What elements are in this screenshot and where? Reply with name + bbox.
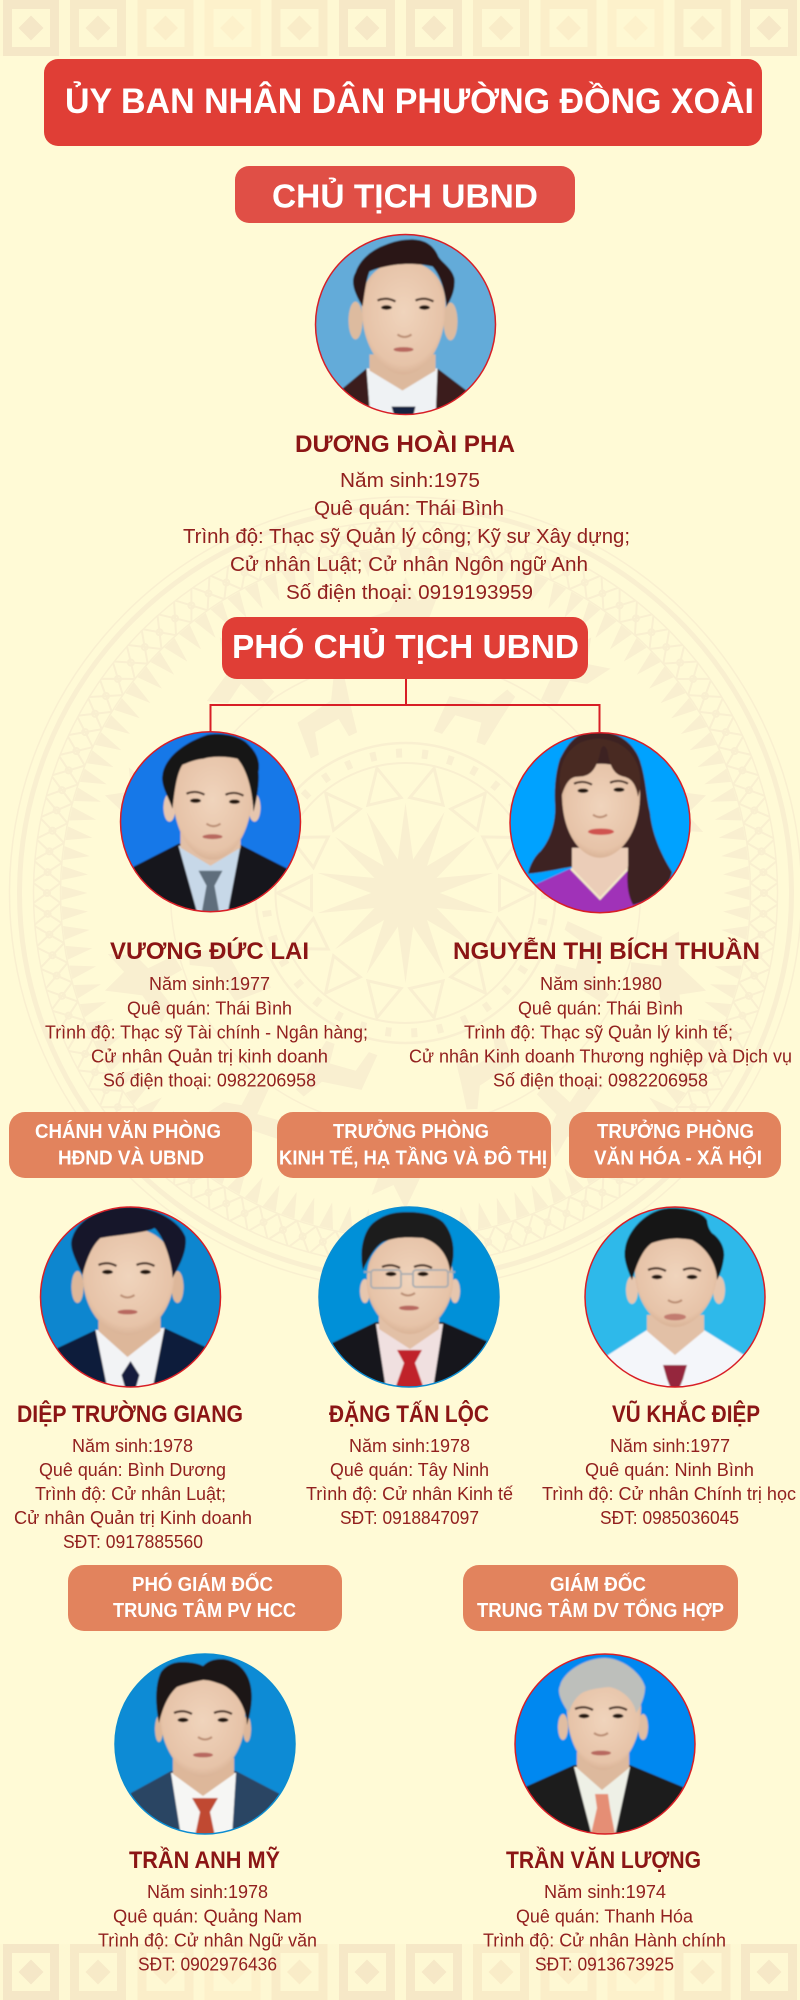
name: Đặng Tấn Lộc: ĐẶNG TẤN LỘC xyxy=(329,1400,489,1428)
panel: Trần Anh Mỹ xyxy=(98,1653,317,1974)
label: trưởng phòng văn hóa: TRƯỞNG PHÒNG xyxy=(597,1119,754,1143)
bio: Trần Anh Mỹ: SĐT: 0902976436 xyxy=(138,1954,277,1974)
panel: Trần Văn Lượng xyxy=(483,1653,726,1974)
name: Diệp Trường Giang: DIỆP TRƯỜNG GIANG xyxy=(17,1400,243,1428)
bio: Trần Anh Mỹ: Năm sinh:1978 xyxy=(147,1882,268,1902)
bio: Vương Đức Lai: Cử nhân Quản trị kinh doanh xyxy=(91,1046,328,1066)
bio: Vương Đức Lai: Năm sinh:1977 xyxy=(149,974,270,994)
bio: Đặng Tấn Lộc: Trình độ: Cử nhân Kinh tế xyxy=(306,1484,513,1504)
label: chánh văn phòng: HĐND VÀ UBND xyxy=(58,1146,204,1170)
bio: Dương Hoài Pha: Quê quán: Thái Bình xyxy=(314,498,504,520)
bio: Dương Hoài Pha: Trình độ: Thạc sỹ Quản lý công; Kỹ sư Xây dựng; xyxy=(183,526,630,548)
name: Dương Hoài Pha: DƯƠNG HOÀI PHA xyxy=(295,430,515,458)
label: trưởng phòng kinh tế xyxy=(277,1112,551,1178)
bio: Vương Đức Lai: Quê quán: Thái Bình xyxy=(127,998,292,1018)
bio: Nguyễn Thị Bích Thuần: Quê quán: Thái Bình xyxy=(518,998,683,1018)
label: trưởng phòng kinh tế: KINH TẾ, HẠ TẦNG VÀ ĐÔ THỊ xyxy=(279,1146,547,1170)
heading: chủ tịch UBND: CHỦ TỊCH UBND xyxy=(272,178,538,214)
bio: Diệp Trường Giang: SĐT: 0917885560 xyxy=(63,1532,203,1552)
label: chánh văn phòng: CHÁNH VĂN PHÒNG xyxy=(35,1119,221,1143)
connector lines xyxy=(210,679,600,733)
panel: chairman Dương Hoài Pha xyxy=(183,234,630,604)
label: phó giám đốc trung tâm PV HCC xyxy=(68,1565,342,1631)
bio: Vương Đức Lai xyxy=(45,974,368,1090)
name: Vương Đức Lai: VƯƠNG ĐỨC LAI xyxy=(110,937,309,965)
bio: Nguyễn Thị Bích Thuần xyxy=(409,974,792,1090)
label: chánh văn phòng xyxy=(9,1112,252,1178)
bio: Trần Anh Mỹ: Quê quán: Quảng Nam xyxy=(113,1906,302,1926)
label: giám đốc trung tâm DV tổng hợp xyxy=(463,1565,738,1631)
name: Nguyễn Thị Bích Thuần: NGUYỄN THỊ BÍCH THUẦN xyxy=(453,936,760,965)
portrait: Vương Đức Lai xyxy=(120,731,302,917)
bio: Đặng Tấn Lộc: Năm sinh:1978 xyxy=(349,1436,470,1456)
panel: Diệp Trường Giang xyxy=(14,1206,252,1552)
bio: Trần Văn Lượng: Trình độ: Cử nhân Hành chính xyxy=(483,1930,726,1950)
bio: Nguyễn Thị Bích Thuần: Năm sinh:1980 xyxy=(540,974,662,994)
label: trưởng phòng văn hóa xyxy=(569,1112,781,1178)
portrait: Nguyễn Thị Bích Thuần xyxy=(509,732,691,918)
bio: Vũ Khắc Điệp: SĐT: 0985036045 xyxy=(600,1508,739,1528)
label: giám đốc trung tâm DV tổng hợp: GIÁM ĐỐC xyxy=(550,1572,646,1596)
bio: Diệp Trường Giang: Trình độ: Cử nhân Luật; xyxy=(35,1484,226,1504)
portrait: Vũ Khắc Điệp xyxy=(584,1206,766,1392)
heading: phó chủ tịch UBND: PHÓ CHỦ TỊCH UBND xyxy=(232,628,579,665)
panel: Đặng Tấn Lộc xyxy=(306,1206,513,1528)
heading: phó chủ tịch UBND xyxy=(222,617,588,679)
name: Trần Anh Mỹ: TRẦN ANH MỸ xyxy=(129,1846,280,1874)
bio: Vũ Khắc Điệp: Trình độ: Cử nhân Chính trị học xyxy=(542,1484,796,1504)
bio: Vũ Khắc Điệp: Quê quán: Ninh Bình xyxy=(585,1460,754,1480)
bio: Vũ Khắc Điệp: Năm sinh:1977 xyxy=(610,1436,730,1456)
panel: Vương Đức Lai xyxy=(45,731,368,1090)
title banner xyxy=(44,59,762,146)
bio: Trần Anh Mỹ: Trình độ: Cử nhân Ngữ văn xyxy=(98,1930,317,1950)
bio: Diệp Trường Giang: Quê quán: Bình Dương xyxy=(39,1460,226,1480)
bio: Đặng Tấn Lộc: Quê quán: Tây Ninh xyxy=(330,1460,489,1480)
heading: chủ tịch UBND xyxy=(235,166,575,223)
title banner: ỦY BAN NHÂN DÂN PHƯỜNG ĐỒNG XOÀI xyxy=(65,81,754,121)
bio: Trần Anh Mỹ xyxy=(98,1882,317,1974)
bio: Dương Hoài Pha: Cử nhân Luật; Cử nhân Ngôn ngữ Anh xyxy=(230,554,588,576)
bio: Vương Đức Lai: Trình độ: Thạc sỹ Tài chính - Ngân hàng; xyxy=(45,1022,368,1042)
panel: Vũ Khắc Điệp xyxy=(542,1206,796,1528)
bio: Đặng Tấn Lộc: SĐT: 0918847097 xyxy=(340,1508,479,1528)
label: trưởng phòng kinh tế: TRƯỞNG PHÒNG xyxy=(333,1119,489,1143)
portrait: Trần Văn Lượng xyxy=(514,1653,696,1840)
name: Trần Văn Lượng: TRẦN VĂN LƯỢNG xyxy=(506,1846,701,1874)
label: giám đốc trung tâm DV tổng hợp: TRUNG TÂM DV TỔNG HỢP xyxy=(477,1598,724,1622)
bio: Nguyễn Thị Bích Thuần: Cử nhân Kinh doanh Thương nghiệp và Dịch vụ xyxy=(409,1046,792,1066)
bio: Dương Hoài Pha xyxy=(183,470,630,604)
bio: Vũ Khắc Điệp xyxy=(542,1436,796,1528)
bio: Vương Đức Lai: Số điện thoại: 0982206958 xyxy=(103,1070,316,1090)
bio: Trần Văn Lượng: SĐT: 0913673925 xyxy=(535,1954,674,1974)
bio: Trần Văn Lượng: Năm sinh:1974 xyxy=(544,1882,666,1902)
label: phó giám đốc trung tâm PV HCC: TRUNG TÂM PV HCC xyxy=(113,1598,296,1622)
bio: Nguyễn Thị Bích Thuần: Số điện thoại: 0982206958 xyxy=(493,1070,708,1090)
label: trưởng phòng văn hóa: VĂN HÓA - XÃ HỘI xyxy=(594,1146,762,1170)
panel: Nguyễn Thị Bích Thuần xyxy=(409,732,792,1090)
bio: Diệp Trường Giang: Cử nhân Quản trị Kinh doanh xyxy=(14,1508,252,1528)
bio: Dương Hoài Pha: Năm sinh:1975 xyxy=(340,470,480,492)
bio: Trần Văn Lượng xyxy=(483,1882,726,1974)
portrait: Đặng Tấn Lộc xyxy=(318,1206,500,1392)
portrait: Diệp Trường Giang xyxy=(40,1206,222,1392)
bio: Diệp Trường Giang xyxy=(14,1436,252,1552)
bio: Nguyễn Thị Bích Thuần: Trình độ: Thạc sỹ Quản lý kinh tế; xyxy=(464,1022,733,1042)
portrait: Dương Hoài Pha xyxy=(314,234,496,420)
portrait: Trần Anh Mỹ xyxy=(114,1653,296,1839)
bio: Dương Hoài Pha: Số điện thoại: 0919193959 xyxy=(286,582,533,604)
name: Vũ Khắc Điệp: VŨ KHẮC ĐIỆP xyxy=(612,1400,760,1428)
bio: Diệp Trường Giang: Năm sinh:1978 xyxy=(72,1436,193,1456)
bio: Trần Văn Lượng: Quê quán: Thanh Hóa xyxy=(516,1906,694,1926)
label: phó giám đốc trung tâm PV HCC: PHÓ GIÁM ĐỐC xyxy=(132,1572,273,1596)
bio: Đặng Tấn Lộc xyxy=(306,1436,513,1528)
